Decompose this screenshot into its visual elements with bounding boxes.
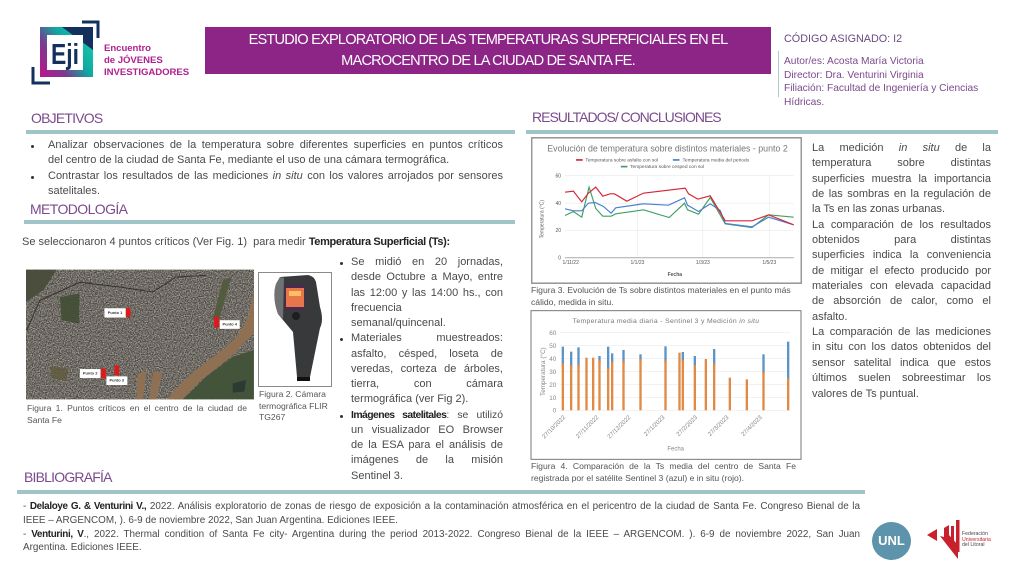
title banner (205, 27, 771, 74)
header info: code and authors: Hídricas. (784, 97, 824, 108)
figure 3: line chart of temperature by material: 1/3/23 (696, 260, 710, 266)
logo: Federación Universitaria del Litoral: Universitaria (962, 537, 991, 543)
objectives text: satelitales. (48, 185, 100, 197)
methodology bullet list: Sentinel 3. (351, 470, 403, 482)
figure 4: bar chart Sentinel 3 vs in situ: 27/11/2022 (575, 414, 601, 440)
figure 4: bar chart Sentinel 3 vs in situ: 10 (549, 395, 557, 402)
bibliography text: - Venturini, V., 2022. Thermal condition of Santa Fe city- Argentina during the period 2013-2022. Congreso Bienal de la IEEE – ARGENCOM. ). 6-9 de noviembre 2022, San Juan (23, 529, 860, 540)
methodology bullet list: semanal/quincenal. (351, 317, 446, 329)
header info: code and authors: Filiación: Facultad de Ingeniería y Ciencias (784, 83, 978, 94)
logo: Encuentro de Jóvenes Investigadores: Encuentro (104, 43, 151, 54)
heading: Objetivos: OBJETIVOS (31, 110, 102, 126)
header info: code and authors: Autor/es: Acosta María Victoria (784, 56, 924, 67)
figure 3: line chart of temperature by material: 1/11/22 (563, 260, 579, 266)
figure 3: line chart of temperature by material: Evolución de temperatura sobre distintos materiales - punto 2 (547, 143, 788, 153)
logo: Encuentro de Jóvenes Investigadores: Eji (51, 39, 79, 71)
figure 1 caption: Santa Fe (27, 414, 62, 424)
figure 2 caption: Figura 2. Cámara (259, 389, 326, 399)
logo: Encuentro de Jóvenes Investigadores: de JÓVENES (104, 55, 163, 66)
heading: Resultados / Conclusiones: RESULTADOS/ CONCLUSIONES (532, 109, 721, 125)
conclusions text (812, 142, 991, 400)
methodology bullet list: asfalto, césped, loseta de (351, 348, 503, 360)
figure 3: line chart of temperature by material: Temperatura (°C) (540, 200, 546, 238)
figure 4: bar chart Sentinel 3 vs in situ: 30 (549, 369, 557, 376)
figure 4: bar chart Sentinel 3 vs in situ: 60 (549, 330, 557, 337)
logo: UNL: UNL (878, 533, 905, 548)
figure 3 caption: Figura 3. Evolución de Ts sobre distintos materiales en el punto más (531, 285, 791, 295)
heading: Metodología: METODOLOGÍA (30, 201, 127, 217)
figure 4: bar chart Sentinel 3 vs in situ: Fecha (667, 446, 685, 452)
conclusions text: últimos suelen sobreestimar los (812, 372, 991, 384)
objectives text: Analizar observaciones de la temperatura sobre diferentes superficies en puntos críticos (48, 139, 503, 151)
conclusions text: superficies muestra la importancia (812, 173, 991, 185)
figure 2: thermographic camera (258, 272, 332, 387)
methodology bullet list: Se midió en 20 jornadas, (351, 256, 503, 268)
logo: Federación Universitaria del Litoral: Federación (962, 531, 988, 537)
methodology bullet list: de la ESA para el análisis de (351, 439, 503, 451)
conclusions text: La comparación de las mediciones (812, 326, 991, 338)
bibliography text: IEEE – ARGENCOM, ). 6-9 de noviembre 2022, San Juan Argentina. Ediciones IEEE. (23, 515, 398, 526)
figure 3: line chart of temperature by material: Fecha (668, 272, 682, 278)
figure 4: bar chart Sentinel 3 vs in situ: Temperatura (°C) (539, 347, 547, 396)
figure 3: line chart of temperature by material: 1/1/23 (631, 260, 645, 266)
figure 1: aerial map with critical points: Punto 4 (222, 322, 238, 327)
logo: Federación Universitaria del Litoral: del Litoral (962, 542, 984, 548)
figure 1 caption (27, 403, 247, 424)
title banner: ESTUDIO EXPLORATORIO DE LAS TEMPERATURAS SUPERFICIALES EN EL (249, 32, 727, 48)
figure 4 caption: registrada por el satélite Sentinel 3 (azul) e in situ (rojo). (531, 472, 744, 482)
logo: UNL (872, 522, 911, 560)
figure 3 caption: cálido, medida in situ. (531, 296, 614, 306)
figure 4: bar chart Sentinel 3 vs in situ: 27/12/2022 (607, 414, 633, 440)
figure 1: aerial map with critical points: Punto 1 (108, 310, 123, 315)
figure 3: line chart of temperature by material: 20 (555, 228, 561, 234)
figure 4: bar chart Sentinel 3 vs in situ: 27/1/2023 (643, 414, 667, 438)
figure 2 caption: termográfica FLIR (259, 401, 328, 411)
title banner: MACROCENTRO DE LA CIUDAD DE SANTA FE. (341, 53, 635, 69)
header info: code and authors (778, 32, 978, 108)
figure 3: line chart of temperature by material: 1/5/23 (762, 260, 776, 266)
bibliography text: Argentina. Ediciones IEEE. (23, 542, 142, 553)
figure 2 caption (259, 389, 328, 422)
figure 4: bar chart Sentinel 3 vs in situ: Temperatura media diaria - Sentinel 3 y Medición in situ (573, 318, 759, 325)
objectives text (31, 139, 503, 197)
conclusions text: temperatura sobre distintas (812, 157, 991, 169)
header info: code and authors: Director: Dra. Venturini Virginia (784, 70, 924, 81)
figure 4: bar chart Sentinel 3 vs in situ: 27/4/2023 (741, 414, 764, 438)
logo: Federación Universitaria del Litoral (927, 520, 991, 559)
header info: code and authors: CÓDIGO ASIGNADO: I2 (784, 33, 902, 45)
figure 1: aerial map with critical points: Punto 3 (109, 378, 125, 383)
logo: Encuentro de Jóvenes Investigadores: INVESTIGADORES (104, 67, 189, 78)
figure 4 caption: Figura 4. Comparación de la Ts media del centro de Santa Fe (531, 461, 796, 471)
bibliography text (23, 501, 860, 553)
conclusions text: in situ con los datos obtenidos del (812, 341, 991, 353)
conclusions text: La comparación de los resultados (812, 219, 991, 231)
conclusions text: la Ts en las zonas urbanas. (812, 203, 945, 215)
figure 4 caption (531, 461, 796, 482)
methodology bullet list: desde Octubre a Mayo, entre (351, 271, 503, 283)
figure 3: line chart of temperature by material: 0 (558, 256, 561, 262)
conclusions text: de las sombras en la regulación de (812, 188, 991, 200)
figure 4: bar chart Sentinel 3 vs in situ: 0 (553, 408, 557, 415)
figure 4: bar chart Sentinel 3 vs in situ: 27/3/2023 (707, 414, 731, 438)
figure 4: bar chart Sentinel 3 vs in situ: 27/10/2022 (542, 414, 568, 440)
figure 1 caption: Figura 1. Puntos críticos en el centro de la ciudad de (27, 403, 247, 413)
conclusions text: superficies indica la conveniencia (812, 249, 991, 261)
figure 4: bar chart Sentinel 3 vs in situ: 50 (549, 343, 557, 350)
figure 4: bar chart Sentinel 3 vs in situ: 27/2/2023 (676, 414, 700, 438)
figure 1: aerial map with critical points (26, 270, 254, 400)
conclusions text: valores de Ts puntual. (812, 388, 919, 400)
figure 3: line chart of temperature by material: 60 (555, 173, 561, 179)
figure 3: line chart of temperature by material (531, 137, 802, 284)
figure 3 caption (531, 285, 791, 306)
conclusions text: sensor satelital indica que estos (812, 357, 991, 369)
figure 3: line chart of temperature by material: Temperatura sobre asfalto con sol (585, 157, 658, 163)
figure 4: bar chart Sentinel 3 vs in situ: 20 (549, 382, 557, 389)
figure 2 caption: TG267 (259, 412, 285, 422)
methodology bullet list: Imágenes satelitales: se utilizó (351, 410, 503, 420)
conclusions text: La medición in situ de la (812, 142, 991, 154)
conclusions text: de mitigar el efecto producido por (812, 265, 991, 277)
methodology bullet list: frecuencia (351, 302, 402, 314)
figure 3: line chart of temperature by material: 40 (555, 201, 561, 207)
conclusions text: materiales con elevada capacidad (812, 280, 991, 292)
conclusions text: de absorción de calor, como el (812, 295, 991, 307)
figure 4: bar chart Sentinel 3 vs in situ (530, 310, 802, 460)
figure 1: aerial map with critical points: Punto 2 (83, 371, 98, 376)
objectives text: del centro de la ciudad de Santa Fe, mediante el uso de una cámara termográfica. (48, 154, 449, 166)
methodology intro: Se seleccionaron 4 puntos críticos (Ver Fig. 1) para medir Temperatura Superficial (Ts): (22, 236, 450, 248)
methodology bullet list: las 12:00 y las 14:00 hs., con (351, 286, 503, 298)
objectives text: Contrastar los resultados de las mediciones in situ con los valores arrojados por sensores (48, 170, 503, 182)
methodology bullet list: veredas, corteza de árboles, (351, 363, 503, 375)
figure 4: bar chart Sentinel 3 vs in situ: 40 (549, 356, 557, 363)
figure 3: line chart of temperature by material: Temperatura sobre cesped con sol (630, 164, 704, 170)
conclusions text: asfalto. (812, 311, 847, 323)
conclusions text: obtenidos para distintas (812, 234, 991, 246)
heading: Bibliografía: BIBLIOGRAFÍA (24, 469, 112, 485)
figure 3: line chart of temperature by material: Temperatura media del periodo (683, 157, 750, 163)
logo: Encuentro de Jóvenes Investigadores (32, 20, 189, 84)
bibliography text: - Delaloye G. & Venturini V., 2022. Análisis exploratorio de zonas de riesgo de exposición a la contaminación atmosférica en el pericentro de la ciudad de Santa Fe. Congreso Bienal de la (23, 501, 860, 512)
methodology bullet list: tierra, con cámara (351, 378, 503, 390)
methodology bullet list: imágenes de la misión (351, 454, 503, 466)
methodology bullet list (340, 256, 503, 482)
methodology bullet list: un visualizador EO Browser (351, 424, 503, 436)
methodology bullet list: Materiales muestreados: (351, 332, 503, 344)
methodology bullet list: termográfica (ver Fig 2). (351, 393, 468, 405)
